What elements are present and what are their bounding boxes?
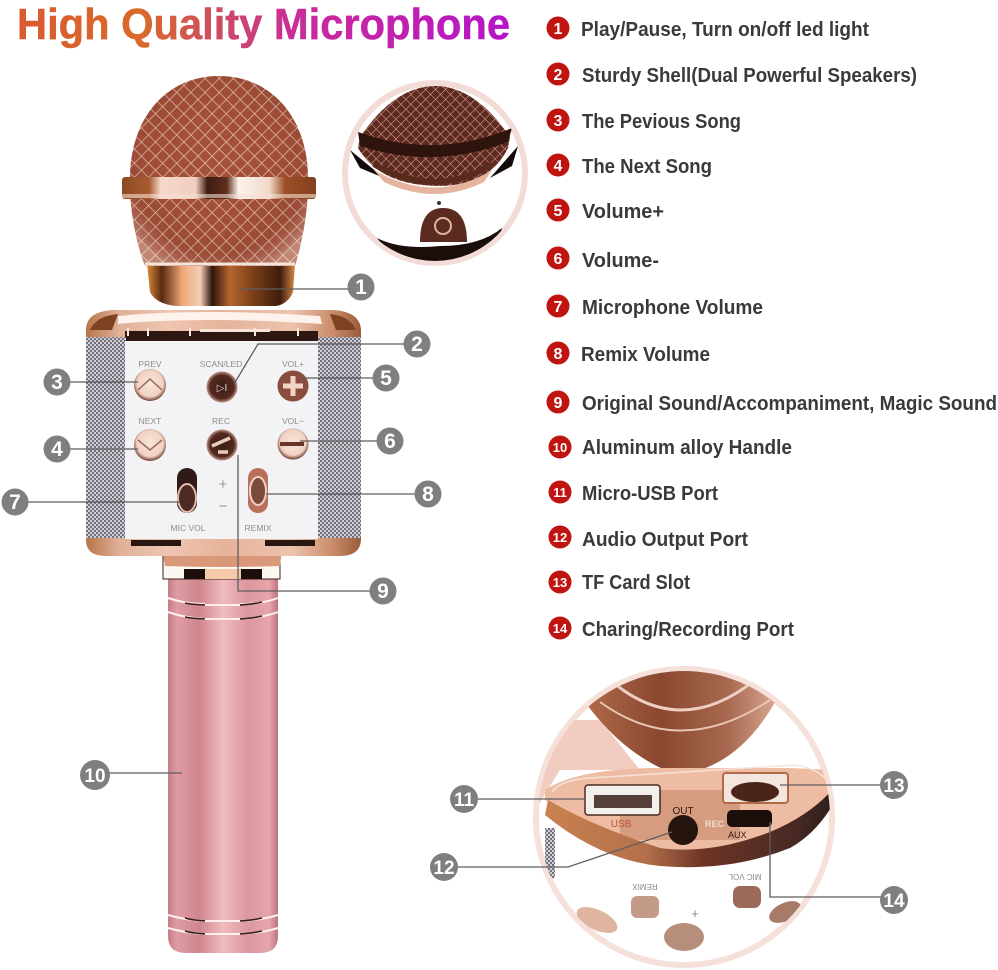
callout 7: 7 — [9, 491, 21, 514]
item 6: Volume- — [582, 250, 659, 272]
plus minus marks: − — [219, 498, 228, 515]
micro usb port: REC — [705, 819, 725, 829]
item 8 — [546, 342, 710, 366]
item 7: 7 — [554, 299, 563, 316]
item 4: 4 — [554, 158, 563, 175]
button: scan/led: SCAN/LED — [200, 359, 242, 369]
button: next — [134, 416, 166, 461]
item 4: The Next Song — [582, 156, 712, 178]
usb port: USB — [611, 819, 632, 830]
button: vol+: VOL+ — [282, 359, 304, 369]
button: scan/led: ▷I — [217, 383, 227, 394]
callout 8: 8 — [422, 483, 434, 506]
item 10: 10 — [553, 440, 567, 455]
item 1: Play/Pause, Turn on/off led light — [581, 19, 869, 41]
callout 6 — [376, 428, 404, 454]
item 12 — [548, 526, 748, 551]
item 13 — [548, 570, 690, 594]
callout 11 — [450, 785, 478, 813]
microphone — [86, 76, 361, 953]
item 4 — [546, 154, 712, 178]
micro usb port — [705, 810, 772, 840]
item 6 — [546, 246, 659, 272]
button: scan/led — [200, 359, 242, 402]
item 1: 1 — [554, 21, 563, 38]
callout 1 — [348, 274, 374, 300]
lower buttons — [573, 872, 804, 951]
button: vol- — [278, 416, 308, 460]
inset: top circle detail — [345, 83, 525, 263]
head ring — [122, 177, 316, 199]
lower buttons: REMIX — [632, 882, 658, 891]
callout 5: 5 — [380, 367, 392, 390]
item 12: 12 — [553, 530, 567, 545]
callout 13: 13 — [883, 776, 905, 797]
callout 6: 6 — [384, 430, 396, 453]
microphone handle — [168, 578, 278, 953]
neck — [147, 264, 295, 306]
slider: mic vol: MIC VOL — [171, 523, 206, 533]
button: rec: REC — [212, 416, 230, 426]
tf card slot — [723, 773, 788, 803]
micro usb port: AUX — [728, 830, 747, 840]
callout 9 — [370, 578, 396, 604]
item 13: TF Card Slot — [582, 572, 690, 594]
item 6: 6 — [554, 251, 563, 268]
lower buttons: + — [691, 906, 699, 921]
callout 10 — [80, 760, 110, 790]
slider: remix: REMIX — [245, 523, 272, 533]
microphone head mesh — [130, 76, 308, 266]
item 2: 2 — [554, 67, 563, 84]
item 5: Volume+ — [582, 201, 664, 223]
callout lines — [26, 289, 882, 897]
slider: remix — [245, 468, 272, 533]
item 11: 11 — [553, 485, 567, 500]
callout 1: 1 — [355, 276, 367, 299]
callout 2: 2 — [411, 333, 423, 356]
item 3 — [546, 108, 741, 133]
microphone body — [86, 310, 361, 556]
callout 7 — [2, 488, 28, 516]
button: next: NEXT — [139, 416, 161, 426]
callout 14 — [880, 886, 908, 914]
button: prev — [134, 359, 166, 401]
item 3: 3 — [554, 113, 563, 130]
feature list — [546, 16, 997, 641]
button: rec — [206, 416, 238, 460]
item 14: Charing/Recording Port — [582, 619, 794, 641]
callout 13 — [880, 771, 908, 799]
item 3: The Pevious Song — [582, 111, 741, 133]
title: High Quality Microphone — [17, 0, 510, 49]
callout 11: 11 — [454, 790, 474, 811]
callout 3 — [44, 368, 70, 396]
button: prev: PREV — [138, 359, 162, 369]
item 13: 13 — [553, 575, 567, 590]
callout 10: 10 — [84, 766, 106, 787]
callout 8 — [414, 480, 442, 508]
item 11: Micro-USB Port — [582, 483, 718, 505]
callout 12 — [430, 853, 458, 881]
callout 14: 14 — [883, 891, 905, 912]
item 11 — [548, 480, 718, 505]
inset: bottom circle detail — [535, 665, 835, 965]
callout 3: 3 — [51, 371, 63, 394]
audio jack: OUT — [672, 806, 694, 817]
lower buttons: MIC VOL — [728, 872, 761, 881]
item 2: Sturdy Shell(Dual Powerful Speakers) — [582, 65, 917, 87]
item 5: 5 — [554, 203, 563, 220]
slider: mic vol — [171, 468, 206, 533]
button: vol+ — [278, 359, 308, 402]
item 7: Microphone Volume — [582, 297, 763, 319]
plus minus marks: + — [219, 476, 228, 493]
collar under body — [162, 550, 282, 579]
callout 12: 12 — [433, 858, 455, 879]
item 14: 14 — [553, 621, 568, 636]
item 10: Aluminum alloy Handle — [582, 437, 792, 459]
usb port — [585, 785, 660, 830]
button: vol-: VOL− — [282, 416, 304, 426]
gray numbered callouts — [2, 274, 908, 914]
item 9: 9 — [554, 395, 563, 412]
control buttons — [134, 359, 308, 533]
item 8: Remix Volume — [581, 344, 710, 366]
callout 4 — [44, 436, 70, 462]
callout 5 — [372, 364, 400, 392]
callout 2 — [404, 330, 430, 358]
audio jack — [668, 806, 698, 845]
item 8: 8 — [554, 346, 563, 363]
item 5 — [546, 198, 664, 223]
callout 4: 4 — [51, 438, 63, 461]
callout 9: 9 — [377, 580, 389, 603]
item 12: Audio Output Port — [582, 529, 748, 551]
